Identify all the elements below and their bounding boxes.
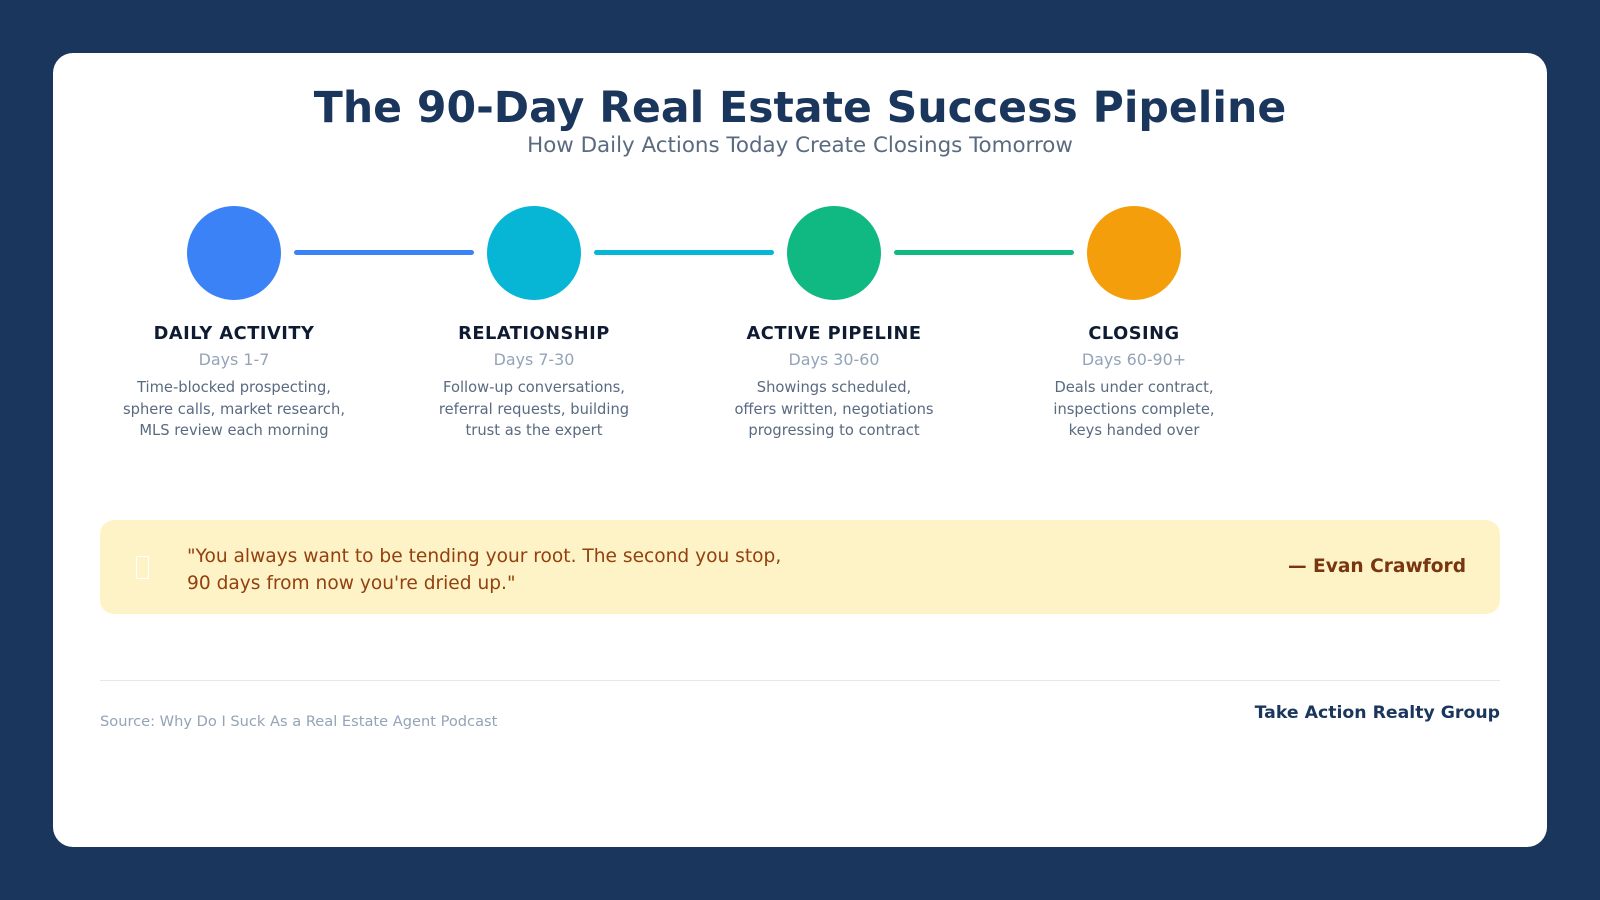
stage: active pipeline — [734, 323, 934, 439]
stage: relationship: Follow-up conversations, — [443, 379, 625, 396]
stage: daily activity: Days 1-7 — [199, 350, 269, 369]
quote text: 90 days from now you're dried up." — [187, 573, 516, 594]
quote text — [187, 546, 781, 594]
stage: closing: CLOSING — [1088, 323, 1180, 344]
source text: Source: Why Do I Suck As a Real Estate Agent Podcast — [100, 713, 497, 730]
stage: daily activity: MLS review each morning — [139, 422, 329, 439]
connector 1 — [294, 250, 474, 255]
stage: closing: Deals under contract, — [1054, 379, 1214, 396]
stage: closing: keys handed over — [1069, 422, 1199, 439]
icon: quote placeholder — [136, 556, 149, 579]
stage: daily activity: sphere calls, market research, — [123, 400, 345, 418]
stage: daily activity: DAILY ACTIVITY — [154, 323, 314, 344]
stage: active pipeline: Days 30-60 — [789, 350, 879, 369]
brand: Take Action Realty Group — [1255, 703, 1500, 723]
stage: relationship — [439, 323, 629, 439]
stage: active pipeline: ACTIVE PIPELINE — [747, 323, 921, 344]
stage: closing — [1053, 323, 1215, 439]
subtitle: How Daily Actions Today Create Closings Tomorrow — [527, 133, 1073, 158]
connector 3 — [894, 250, 1074, 255]
connector 2 — [594, 250, 774, 255]
stage: daily activity — [123, 323, 345, 439]
title: The 90-Day Real Estate Success Pipeline — [314, 83, 1286, 133]
stage: relationship: RELATIONSHIP — [458, 323, 610, 344]
stage: closing: Days 60-90+ — [1082, 350, 1186, 369]
quote author: — Evan Crawford — [1288, 556, 1466, 577]
icon: circle closing — [1087, 206, 1181, 300]
stage: relationship: Days 7-30 — [494, 350, 574, 369]
icon: circle active pipeline — [787, 206, 881, 300]
stage: active pipeline: offers written, negotiations — [734, 400, 934, 418]
icon: circle relationship — [487, 206, 581, 300]
quote text: "You always want to be tending your root. The second you stop, — [187, 546, 781, 567]
callout: quote — [100, 520, 1500, 614]
stage: active pipeline: Showings scheduled, — [757, 379, 911, 396]
stage: active pipeline: progressing to contract — [748, 422, 920, 439]
stage: closing: inspections complete, — [1053, 400, 1215, 418]
stage: daily activity: Time-blocked prospecting, — [137, 379, 331, 396]
stage: relationship: referral requests, building — [439, 400, 629, 418]
stage: relationship: trust as the expert — [466, 422, 602, 439]
icon: circle daily activity — [187, 206, 281, 300]
